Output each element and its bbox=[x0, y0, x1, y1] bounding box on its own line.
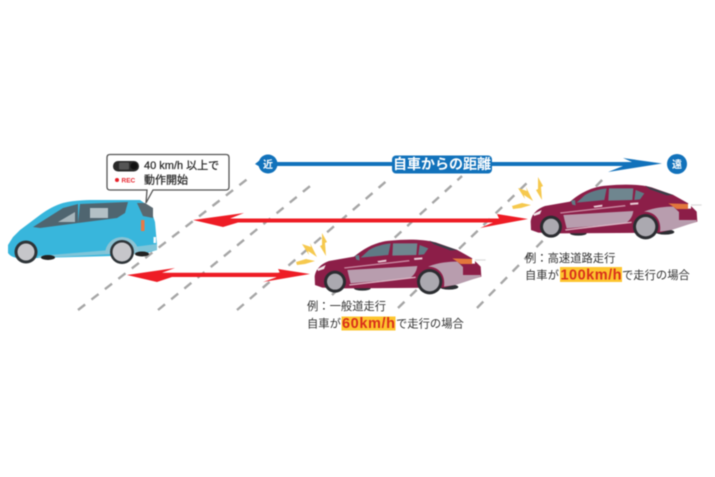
label: ordinary road example: で走行の場合 bbox=[396, 318, 464, 330]
callout text: 40 km/h 以上で bbox=[144, 159, 219, 172]
callout text: 動作開始 bbox=[144, 172, 188, 186]
rec indicator: REC bbox=[122, 178, 136, 184]
red car: ordinary road bbox=[315, 240, 486, 294]
far marker bbox=[667, 154, 687, 174]
blue car bbox=[8, 200, 157, 264]
axis title: 自車からの距離 bbox=[393, 156, 491, 172]
label: ordinary road example: 自車が bbox=[307, 316, 341, 330]
label: expressway example bbox=[525, 251, 690, 284]
axis arrow bbox=[262, 158, 662, 172]
label: expressway example: で走行の場合 bbox=[622, 269, 690, 282]
callout bbox=[107, 154, 229, 203]
far marker: 遠 bbox=[672, 158, 682, 171]
red car: expressway bbox=[531, 185, 702, 239]
label: ordinary road example: 例：一般道走行 bbox=[307, 299, 386, 313]
icon: impact flash far car bbox=[512, 177, 543, 209]
arrow: lower red distance bbox=[127, 268, 310, 282]
label: expressway example: 100km/h bbox=[560, 268, 622, 284]
near marker bbox=[255, 154, 278, 174]
label: expressway example: 例：高速道路走行 bbox=[525, 251, 615, 265]
distance axis bbox=[255, 154, 687, 174]
label: expressway example: 自車が bbox=[525, 268, 559, 282]
label: ordinary road example bbox=[307, 299, 464, 332]
label: ordinary road example: 60km/h bbox=[342, 316, 395, 332]
icon: dashcam bbox=[113, 161, 139, 172]
icon: impact flash near car bbox=[296, 233, 327, 265]
near marker: 近 bbox=[263, 158, 273, 171]
arrow: upper red distance bbox=[193, 213, 528, 228]
